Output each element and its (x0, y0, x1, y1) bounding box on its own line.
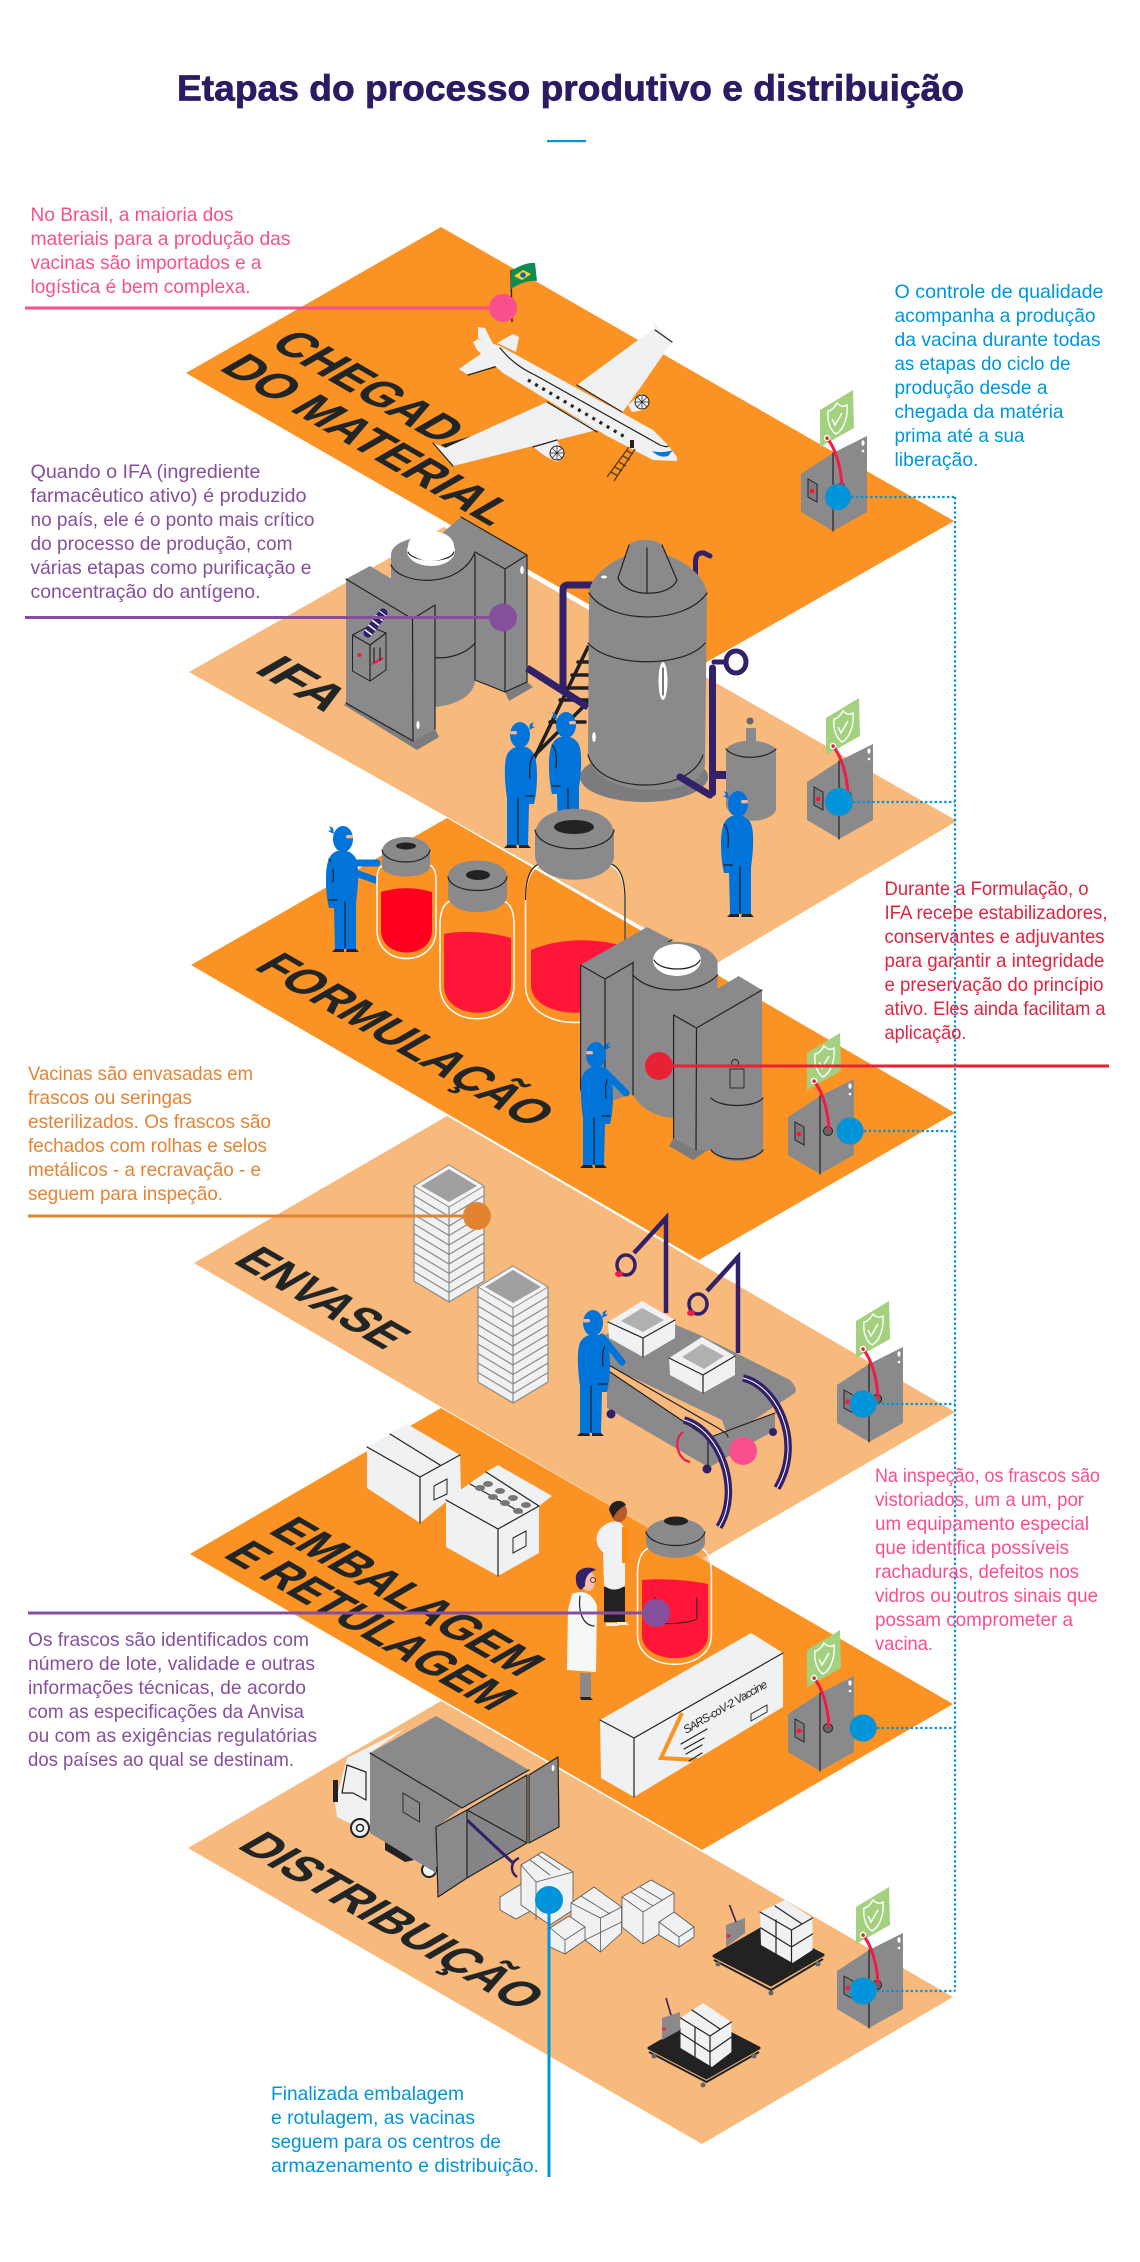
text block: controle de qualidade: da vacina durante todas (894, 329, 1101, 351)
equipment: large tank (580, 540, 708, 802)
text block: chegada do material (30, 204, 291, 298)
equipment: ladder (530, 647, 592, 767)
text block: envase: seguem para inspeção. (28, 1183, 223, 1205)
quality control device 5 (788, 1630, 854, 1771)
callout: purple leader embalagem (28, 1599, 670, 1627)
panel: IFA (189, 517, 957, 966)
text block: IFA: Quando o IFA (ingrediente (30, 461, 260, 483)
text block: formulação: ativo. Eles ainda facilitam a (884, 998, 1106, 1020)
text block: controle de qualidade: acompanha a produção (894, 305, 1096, 327)
vial 1 (377, 837, 436, 958)
text block: formulação: Durante a Formulação, o (884, 878, 1089, 900)
panel: distribuição (188, 1701, 953, 2144)
callout: quality control markers (825, 484, 876, 2004)
cartons cluster 2 (550, 1887, 622, 1954)
equipment: formulation front cabinet (669, 976, 762, 1160)
callout: pink leader chegada (25, 294, 517, 322)
text block: chegada do material: vacinas são importados e a (30, 252, 262, 274)
curved cables (677, 1378, 788, 1527)
text block: controle de qualidade: chegada da matéria (894, 401, 1064, 423)
text block: controle de qualidade: O controle de qualidade (894, 281, 1104, 303)
text block: distribuição: e rotulagem, as vacinas (271, 2107, 475, 2129)
text block: formulação: e preservação do princípio (884, 974, 1104, 996)
scientist in lab coat (567, 1568, 597, 1700)
text block: inspeção: vistoriados, um a um, por (875, 1489, 1084, 1511)
quality control device 2 (807, 698, 873, 839)
stage label: chegada do material: DO MATERIAL (208, 347, 528, 532)
text block: envase: frascos ou seringas (28, 1087, 192, 1109)
text block: envase (28, 1063, 271, 1205)
text block: inspeção: rachaduras, defeitos nos (875, 1561, 1079, 1583)
stage label: chegada do material: CHEGADA (258, 323, 506, 467)
text block: chegada do material: logística é bem complexa. (30, 276, 250, 298)
text block: IFA (30, 461, 315, 603)
workers in blue (504, 712, 754, 917)
quality control device 4 (837, 1301, 903, 1442)
text block: distribuição (271, 2083, 539, 2177)
text block: embalagem: dos países ao qual se destinam. (28, 1749, 294, 1771)
text block: inspeção: possam comprometer a (875, 1609, 1073, 1631)
text block: distribuição: seguem para os centros de (271, 2131, 501, 2153)
text block: inspeção: que identifica possíveis (875, 1537, 1069, 1559)
text block: chegada do material: materiais para a produção das (30, 228, 291, 250)
equipment: front cabinet (344, 566, 439, 750)
closed carton (367, 1424, 461, 1523)
text block: inspeção: vidros ou outros sinais que (875, 1585, 1098, 1607)
icon: brazil flag (511, 263, 537, 322)
stage label: distribuição: DISTRIBUIÇÃO (226, 1825, 558, 2017)
vial with red liquid (638, 1516, 711, 1664)
vial 3 (526, 809, 625, 1022)
text block: embalagem: informações técnicas, de acordo (28, 1677, 306, 1699)
text block: inspeção: Na inspeção, os frascos são (875, 1465, 1100, 1487)
vaccine carton: SARS-coV-2 Vaccine (682, 1679, 770, 1737)
stage label: formulação: FORMULAÇÃO (243, 946, 568, 1134)
equipment: back cabinet (440, 517, 533, 701)
equipment: purple pipes (527, 553, 710, 707)
text block: formulação: conservantes e adjuvantes (884, 926, 1105, 948)
text block: embalagem: número de lote, validade e outras (28, 1653, 315, 1675)
panel: chegada do material (186, 227, 954, 667)
text block: distribuição: armazenamento e distribuição. (271, 2155, 539, 2177)
vial tray stack 1 (414, 1165, 484, 1302)
cartons cluster 1 (500, 1852, 573, 1925)
text block: IFA: farmacêutico ativo) é produzido (30, 485, 307, 507)
callout: blue leader distribuição (535, 1886, 563, 2177)
worker at vial (326, 826, 381, 952)
text block: IFA: concentração do antígeno. (30, 581, 260, 603)
text block: distribuição: Finalizada embalagem (271, 2083, 464, 2105)
text block: formulação: para garantir a integridade (884, 950, 1104, 972)
panel: embalagem e retulagem (190, 1408, 953, 1850)
text block: formulação (884, 878, 1108, 1044)
conveyor machine (602, 1310, 796, 1474)
panel: envase (194, 1116, 955, 1559)
equipment: small tank (726, 718, 776, 821)
box on conveyor 1 (608, 1301, 675, 1357)
text block: formulação: aplicação. (884, 1022, 966, 1044)
text block: chegada do material: No Brasil, a maioria dos (30, 204, 234, 226)
text block: controle de qualidade: liberação. (894, 449, 978, 471)
quality control device 1 (801, 390, 867, 531)
quality control device 6 (837, 1887, 903, 2028)
text block: formulação: IFA recebe estabilizadores, (884, 902, 1108, 924)
text block: envase: Vacinas são envasadas em (28, 1063, 253, 1085)
red droppers (615, 1271, 695, 1316)
vaccine carton (600, 1633, 783, 1797)
text block: envase: metálicos - a recravação - e (28, 1159, 261, 1181)
title accent dash (547, 140, 586, 142)
callout: pink marker inspeção (729, 1437, 757, 1465)
text block: inspeção: vacina. (875, 1633, 933, 1655)
delivery truck (333, 1716, 559, 1897)
text block: IFA: várias etapas como purificação e (30, 557, 312, 579)
text block: envase: fechados com rolhas e selos (28, 1135, 267, 1157)
text block: IFA: do processo de produção, com (30, 533, 292, 555)
equipment: formulation small tank (711, 1060, 763, 1161)
text block: controle de qualidade: produção desde a (894, 377, 1048, 399)
panel: formulação (191, 809, 955, 1260)
equipment: formulation back cabinet (581, 927, 672, 1103)
text block: embalagem: ou com as exigências regulatórias (28, 1725, 317, 1747)
quality control device 3 (788, 1033, 854, 1174)
stage label: IFA: IFA (243, 649, 362, 718)
callout: orange leader envase (28, 1202, 491, 1230)
dotted quality control connector (851, 497, 955, 1991)
text block: envase: esterilizados. Os frascos são (28, 1111, 271, 1133)
box on conveyor 2 (669, 1337, 735, 1393)
callout: purple leader IFA (25, 604, 517, 632)
pallet 1 (714, 1900, 823, 1996)
open carton with vials (446, 1465, 552, 1576)
equipment: cylinder tank (391, 531, 475, 707)
cartons cluster 3 (622, 1880, 694, 1947)
stage label: embalagem e retulagem: EMBALAGEM (257, 1510, 556, 1683)
callout: red leader formulação (645, 1052, 1109, 1080)
worker at cabinet (580, 1042, 626, 1168)
text block: embalagem: Os frascos são identificados com (28, 1629, 309, 1651)
text block: controle de qualidade: prima até a sua (894, 425, 1025, 447)
text block: controle de qualidade: as etapas do ciclo de (894, 353, 1070, 375)
text block: IFA: no país, ele é o ponto mais crítico (30, 509, 315, 531)
text block: inspeção: um equipamento especial (875, 1513, 1089, 1535)
equipment: right pipes and ring valve (680, 651, 746, 795)
stage label: envase: ENVASE (222, 1240, 422, 1356)
text block: embalagem (28, 1629, 317, 1771)
vial tray stack 2 (478, 1266, 548, 1403)
text block: controle de qualidade (894, 281, 1104, 471)
text block: embalagem: com as especificações da Anvisa (28, 1701, 304, 1723)
title: Etapas do processo produtivo e distribuição (177, 68, 964, 108)
worker at conveyor (577, 1310, 622, 1436)
filling arms (617, 1218, 738, 1353)
scientist with tie (597, 1501, 629, 1626)
pallet 2 (649, 1998, 759, 2088)
stage label: embalagem e retulagem: E RETULAGEM (212, 1534, 529, 1717)
vial 2 (440, 860, 514, 1019)
icon: airplane (433, 320, 677, 481)
text block: inspeção (875, 1465, 1100, 1655)
equipment: formulation cylinder (633, 942, 718, 1118)
